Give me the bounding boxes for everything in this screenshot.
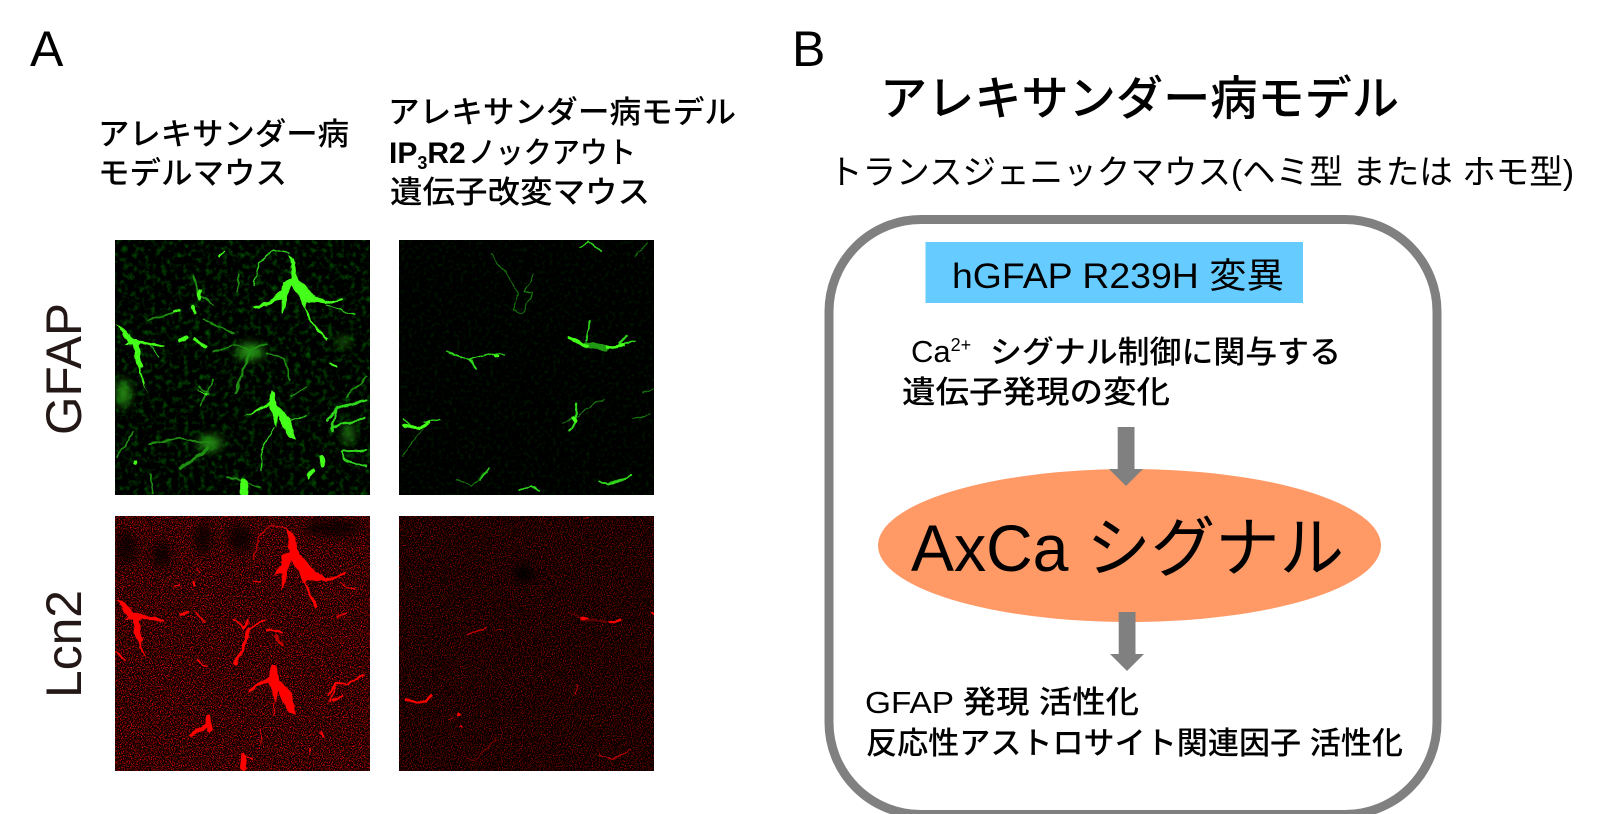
arrow down from ellipse <box>1110 612 1144 671</box>
micrograph: GFAP in model mouse <box>115 240 370 495</box>
mutation box: hGFAP R239H 変異 <box>952 257 1284 296</box>
arrow down into ellipse <box>1109 427 1143 486</box>
text block: gene expression change: Ca <box>911 334 951 369</box>
panel label B: B <box>792 21 825 77</box>
micrograph: Lcn2 in IP3R2 knockout <box>399 516 654 771</box>
micrograph: GFAP in IP3R2 knockout <box>399 240 654 495</box>
row label Lcn2: Lcn2 <box>36 590 92 698</box>
column heading: model mouse: モデルマウス <box>98 156 287 191</box>
text block: gene expression change: シグナル制御に関与する <box>990 335 1341 370</box>
mutation box <box>926 242 1303 303</box>
text block: gene expression change <box>902 334 1341 410</box>
panel label A: A <box>30 21 64 77</box>
column heading: IP3R2 knockout: 遺伝子改変マウス <box>390 175 650 210</box>
text block: gene expression change: 2+ <box>951 335 971 355</box>
row label GFAP: GFAP <box>36 303 92 435</box>
panel: rounded frame <box>829 220 1437 814</box>
column heading: IP3R2 knockout: 3 <box>417 153 427 173</box>
column heading: IP3R2 knockout: IP <box>389 137 417 170</box>
column heading: IP3R2 knockout: R2 <box>427 137 466 170</box>
micrograph: Lcn2 in model mouse <box>115 516 370 771</box>
panel subtitle: トランスジェニックマウス(ヘミ型 または ホモ型) <box>829 154 1574 192</box>
column heading: IP3R2 knockout: ノックアウト <box>468 137 636 170</box>
column heading: IP3R2 knockout: アレキサンダー病モデル <box>388 95 736 130</box>
AxCa signal ellipse: AxCa シグナル <box>911 511 1344 585</box>
AxCa signal ellipse <box>878 469 1381 622</box>
text block: outcomes: GFAP 発現 活性化 <box>865 685 1139 720</box>
text block: outcomes: 反応性アストロサイト関連因子 活性化 <box>866 726 1403 761</box>
text block: gene expression change: 遺伝子発現の変化 <box>902 375 1170 410</box>
column heading: model mouse: アレキサンダー病 <box>98 117 349 152</box>
text block: outcomes <box>865 685 1403 761</box>
column heading: model mouse <box>98 117 349 191</box>
column heading: IP3R2 knockout <box>388 95 736 210</box>
panel title: アレキサンダー病モデル <box>880 72 1399 125</box>
